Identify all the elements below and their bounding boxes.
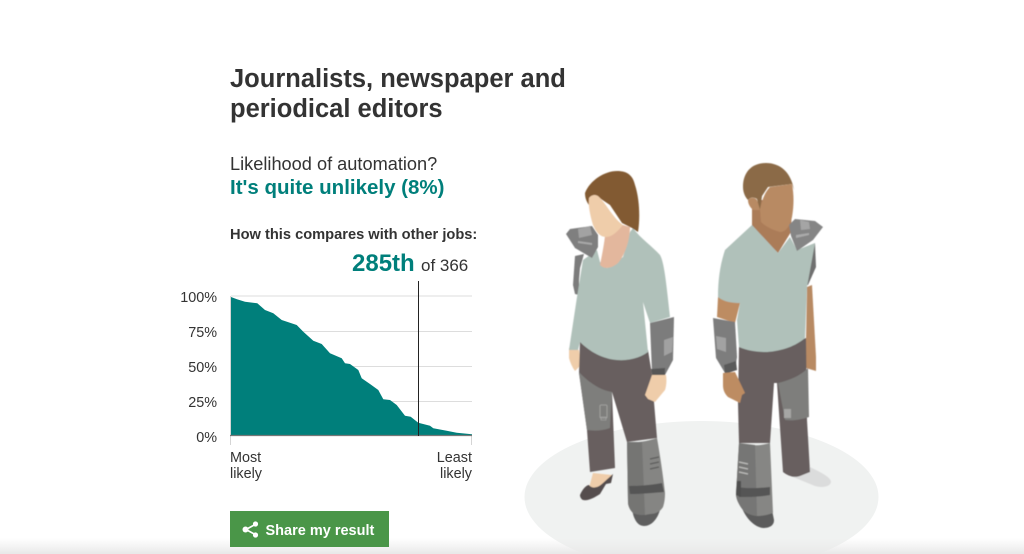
floor ellipse [524, 421, 878, 554]
man ear [748, 198, 760, 210]
chart axis labels [180, 290, 217, 446]
chart left end label: Most [230, 450, 261, 466]
figure: woman with exoskeleton [566, 171, 674, 526]
icon: share [242, 521, 258, 538]
man trousers [738, 338, 810, 477]
chart right end label: likely [440, 466, 473, 482]
man hand [723, 372, 745, 403]
title [230, 65, 566, 123]
woman face [589, 195, 623, 237]
man arm guard [713, 318, 737, 374]
chart axis labels: 50% [188, 360, 217, 376]
chart left end label: likely [230, 466, 263, 482]
woman neck [600, 225, 630, 268]
likelihood answer: It's quite unlikely (8%) [230, 176, 444, 199]
likelihood question: Likelihood of automation? [230, 154, 437, 174]
man shirt [718, 225, 815, 352]
woman trousers [579, 340, 657, 472]
woman foot and shoe [580, 473, 613, 500]
chart right end label: Least [437, 450, 472, 466]
man shadow [793, 467, 831, 487]
share button [230, 511, 389, 547]
man shin guard [736, 443, 774, 528]
man hair [743, 163, 794, 210]
area chart [180, 281, 473, 482]
man shoulder armour [789, 219, 823, 251]
rank label: 285th [352, 250, 415, 277]
woman thigh guard [579, 372, 612, 431]
chart axis labels: 25% [188, 395, 217, 411]
woman left hand [569, 348, 581, 371]
share button: Share my result [266, 523, 374, 539]
man face [760, 184, 794, 232]
chart right end label [437, 450, 473, 482]
chart left end label [230, 450, 263, 482]
woman arm guard [650, 317, 674, 375]
title: Journalists, newspaper and [230, 65, 566, 93]
comparison heading: How this compares with other jobs: [230, 227, 477, 243]
man back arm [806, 285, 816, 371]
woman right hand [645, 375, 666, 402]
man back strap [806, 243, 816, 285]
woman back strap [573, 254, 584, 295]
man thigh guard [778, 368, 809, 420]
woman shirt [569, 228, 670, 360]
woman shoulder armour [566, 226, 598, 258]
chart area fill [231, 297, 472, 435]
woman hair [585, 171, 639, 232]
man left forearm [717, 297, 740, 323]
title: periodical editors [230, 95, 443, 123]
woman shin guard [627, 438, 665, 526]
man neck [752, 200, 792, 253]
chart axis labels: 0% [196, 430, 217, 446]
rank label: of 366 [421, 256, 468, 275]
chart axis labels: 100% [180, 290, 217, 306]
chart axis labels: 75% [188, 325, 217, 341]
rank label [352, 250, 468, 277]
figure: man with exoskeleton [713, 163, 831, 528]
